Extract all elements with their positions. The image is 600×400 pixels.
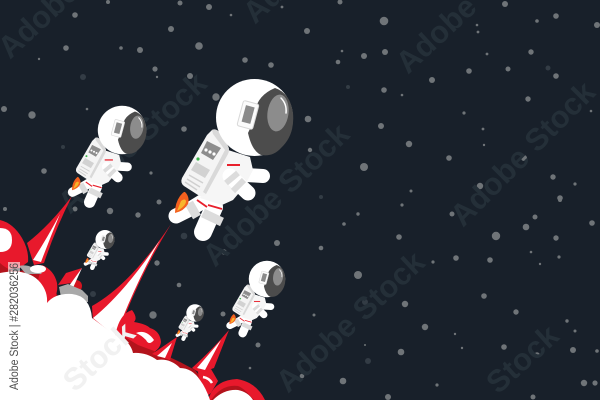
astronaut: small lower centre bbox=[177, 304, 204, 339]
smoke puffs: lower right bbox=[198, 369, 265, 400]
stock ID caption: Adobe Stock | #282036256 bbox=[9, 263, 21, 390]
white smoke cloud bbox=[0, 272, 210, 400]
astronaut: lower right bbox=[229, 261, 285, 333]
trail: small centre bbox=[152, 337, 177, 360]
rocket exhaust: red smoke and flame trails bbox=[0, 196, 265, 400]
watermark on cloud: Stock bbox=[56, 314, 142, 398]
watermark text: Adobe Stock bbox=[269, 244, 432, 399]
astronaut: small left bbox=[85, 230, 115, 268]
trail: upper left bbox=[27, 196, 72, 265]
trail: lower right bbox=[192, 330, 229, 373]
astronaut: large centre bbox=[175, 79, 293, 232]
watermark text: Adobe Stock bbox=[196, 116, 357, 273]
smoke puffs: left bbox=[0, 220, 58, 308]
astronaut: upper left bbox=[72, 106, 146, 202]
trail: small left bbox=[58, 268, 88, 302]
watermark text: Adobe Stock bbox=[443, 74, 600, 233]
trail: main centre bbox=[92, 224, 171, 340]
watermark text: Stock bbox=[479, 317, 566, 400]
watermark text: Adobe Stock bbox=[51, 65, 214, 220]
smoke puffs: centre bbox=[116, 310, 205, 382]
